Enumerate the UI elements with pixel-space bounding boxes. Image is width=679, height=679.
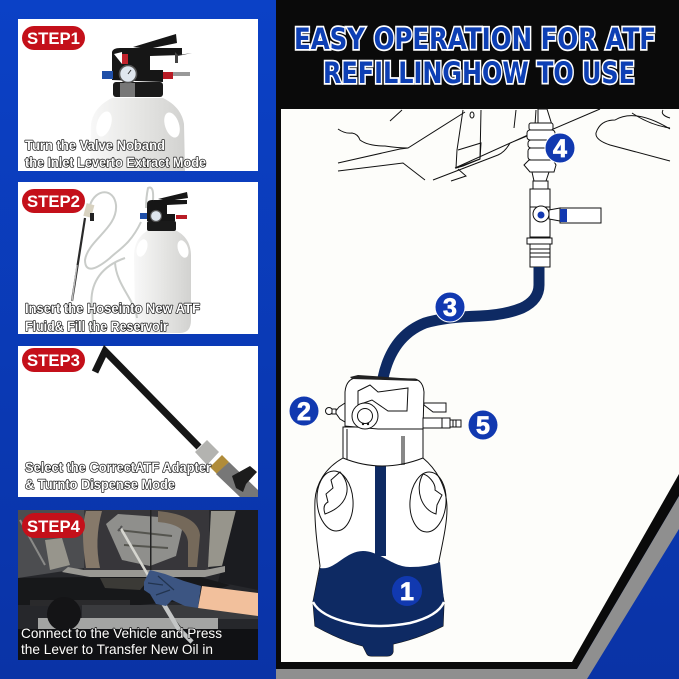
panel: step 1 bbox=[18, 19, 258, 171]
text block: step 3 caption: & Turnto Dispense Mode bbox=[25, 476, 175, 492]
text block: step 4 caption: Connect to the Vehicle and Press bbox=[21, 625, 222, 641]
panel: how-to-use diagram frame bbox=[276, 0, 679, 679]
icon: extractor bottle with black valve head bbox=[90, 34, 192, 171]
diagram: blue hose bbox=[383, 267, 539, 378]
text block: step 1 caption bbox=[25, 137, 206, 170]
label: step 2 badge bbox=[22, 189, 85, 213]
icon: number 5 bbox=[468, 410, 498, 440]
icon: number 4: 4 bbox=[553, 135, 567, 163]
text block: step 3 caption: Select the CorrectATF Adapter bbox=[25, 459, 212, 475]
icon: number 3: 3 bbox=[443, 294, 457, 322]
icon: number 3 bbox=[435, 292, 465, 322]
label: step 3 badge: STEP3 bbox=[27, 352, 80, 370]
diagram: reservoir bottle bbox=[313, 375, 461, 656]
icon: bottle with hose and wand bbox=[72, 188, 191, 333]
label: step 4 badge: STEP4 bbox=[27, 518, 81, 536]
text block: step 3 caption bbox=[25, 459, 212, 492]
icon: number 5: 5 bbox=[476, 412, 490, 440]
text block: step 4 caption: the Lever to Transfer New Oil in bbox=[21, 641, 213, 657]
icon: number 2 bbox=[290, 396, 318, 426]
icon: number 1: 1 bbox=[400, 578, 414, 606]
label: step 2 badge: STEP2 bbox=[27, 193, 80, 211]
text block: step 4 caption bbox=[21, 625, 222, 657]
diagram: vehicle underbody line art bbox=[338, 109, 670, 181]
text block: step 1 caption: the Inlet Leverto Extract Mode bbox=[25, 154, 206, 170]
text block: step 1 caption: Turn the Valve Noband bbox=[25, 137, 165, 153]
text block: step 2 caption: Insert the Hoseinto New ATF bbox=[25, 300, 200, 316]
label: step 1 badge bbox=[22, 26, 85, 50]
title bbox=[294, 22, 656, 90]
icon: number 1 bbox=[392, 576, 422, 606]
label: step 3 badge bbox=[22, 348, 85, 372]
panel: step 3 bbox=[18, 346, 258, 497]
panel: step 2 bbox=[18, 182, 258, 334]
panel: step 4 photo bbox=[18, 510, 258, 660]
icon: dispensing wand bbox=[95, 351, 258, 497]
label: step 1 badge: STEP1 bbox=[27, 30, 80, 48]
text block: step 2 caption: Fluid& Fill the Reservoir bbox=[25, 318, 168, 334]
label: step 4 badge bbox=[22, 513, 85, 538]
image: car underbody bbox=[18, 510, 258, 660]
icon: number 4 bbox=[545, 133, 575, 163]
image: wand and gloved hand bbox=[118, 526, 258, 642]
text block: step 2 caption bbox=[25, 300, 200, 334]
diagram: coupler and ball valve bbox=[524, 109, 601, 267]
icon: number 2: 2 bbox=[297, 398, 311, 426]
